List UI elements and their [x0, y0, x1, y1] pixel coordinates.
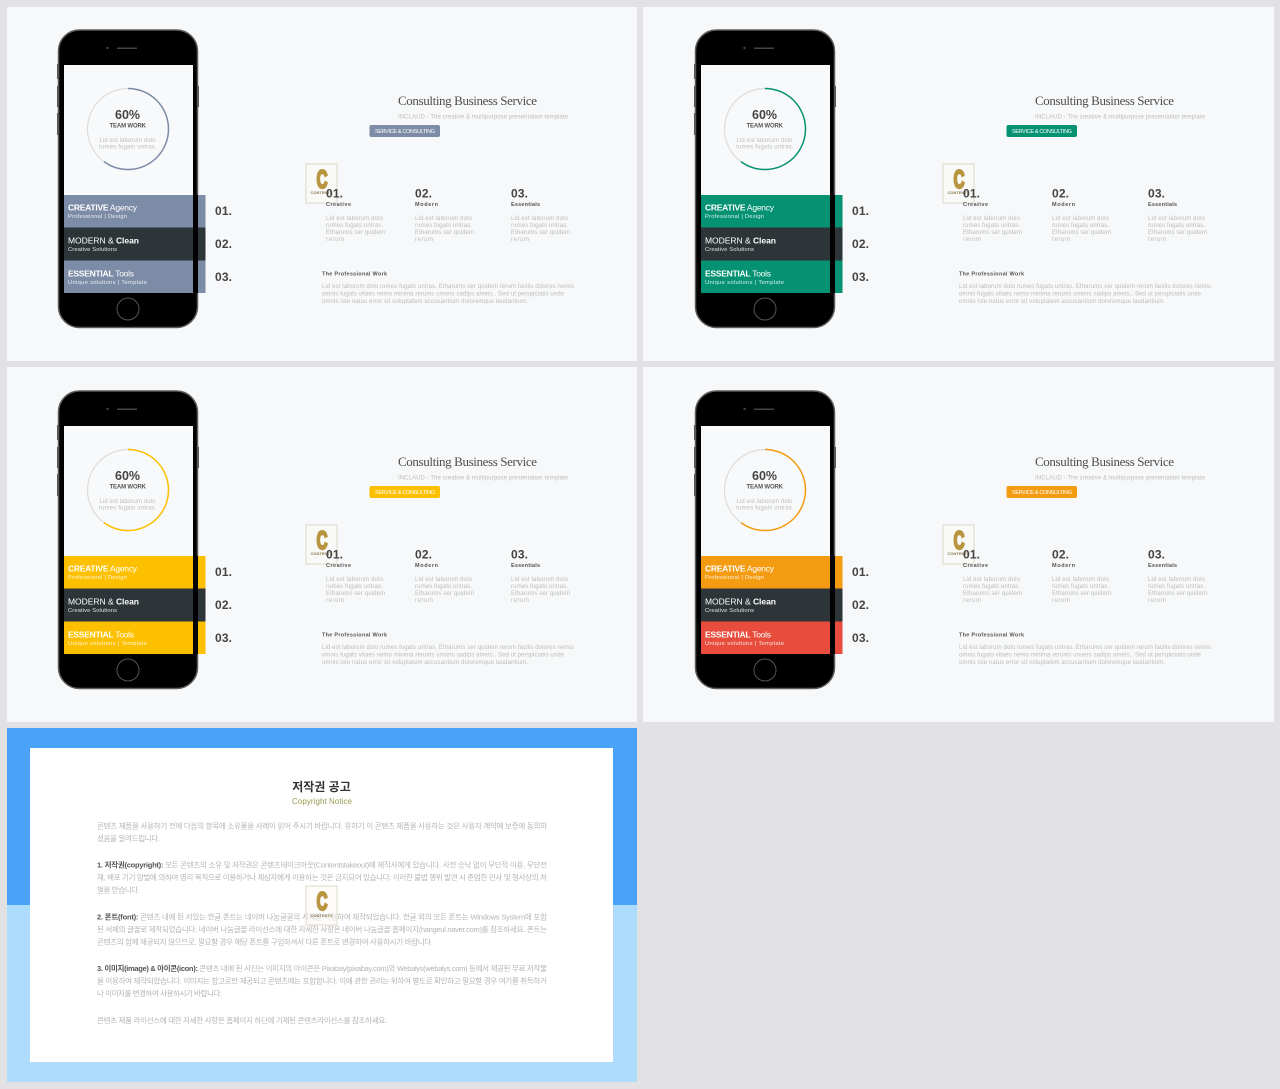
list: side numbers [852, 204, 869, 284]
list: three phone bars with side tabs: Unique solutions | Template [68, 280, 147, 286]
column 2: 02. [415, 186, 432, 200]
icon: watermark logo [943, 164, 974, 203]
column 2: Lid est laborum dolo [1052, 577, 1110, 583]
icon: watermark logo [943, 525, 974, 564]
column 2 [1052, 548, 1111, 604]
column 2: Modern [1052, 202, 1076, 208]
chart: 60 percent ring: rumes fugats untras. [736, 506, 794, 512]
list: three phone bars with side tabs: ESSENTIAL Tools [68, 268, 134, 278]
text block: 3 image and icon: 나 이미지를 변경하여 사용하시기 바랍니다. [97, 988, 222, 998]
column 1 [963, 548, 1022, 604]
subtitle: INCLAUD - The creative & multipurpose presentation template [1035, 476, 1206, 482]
chart: 60 percent ring: Lid est laborum dolo [100, 138, 156, 144]
text block: professional work: The Professional Work [322, 632, 388, 638]
column 3: Etharums ser quidem [1148, 230, 1207, 236]
column 3 [511, 186, 570, 243]
column 2 [415, 548, 474, 604]
badge [1006, 125, 1077, 137]
column 2: rumes fugats untras. [1052, 223, 1109, 229]
list: three phone bars with side tabs: Creative Solutions [68, 608, 117, 614]
text block: professional work: omnis iste natus error sit voluptatem accusantium doloremque laudantium. [322, 660, 528, 666]
column 2: rumes fugats untras. [415, 584, 472, 590]
list: side numbers [852, 565, 869, 645]
column 3: rumes fugats untras. [511, 584, 568, 590]
text block: 1 copyright [97, 860, 547, 894]
text block: professional work [959, 272, 1211, 305]
list: three phone bars with side tabs: MODERN & Clean [68, 236, 139, 246]
column 2: Modern [1052, 563, 1076, 569]
icon: watermark logo: CONTENTS [948, 190, 970, 195]
badge [370, 486, 440, 498]
panel: slide 4 orange and red theme [643, 367, 1274, 722]
column 2: rerum [1052, 598, 1070, 604]
chart: 60 percent ring: Lid est laborum dolo [736, 138, 793, 144]
column 2: 02. [415, 548, 432, 562]
column 3: 03. [1148, 186, 1165, 200]
icon: phone [57, 30, 199, 328]
column 2 [1052, 186, 1111, 243]
icon: watermark logo: C [317, 527, 327, 555]
text block: professional work: The Professional Work [959, 632, 1025, 638]
icon: watermark logo: C [954, 166, 964, 194]
title: Consulting Business Service [398, 93, 537, 108]
badge [370, 125, 440, 137]
column 1: Etharums ser quidem [326, 230, 385, 236]
list: side numbers: 02. [215, 598, 232, 612]
column 1: 01. [963, 186, 980, 200]
list: three phone bars with side tabs: MODERN & Clean [68, 596, 139, 606]
text block: professional work: omnis iste natus error sit voluptatem accusantium doloremque laudantium. [959, 660, 1165, 666]
text block: professional work: The Professional Work [322, 272, 388, 278]
column 3 [511, 548, 570, 604]
column 1: Creative [326, 202, 351, 208]
column 2: rumes fugats untras. [415, 223, 472, 229]
list: three phone bars with side tabs: MODERN & Clean [705, 236, 776, 246]
text block: professional work: omnis fugats vitaes nemo minima rerums unsers sadips amets.. Sed ut perspiciatis unde [322, 652, 565, 658]
panel: slide 3 yellow theme [7, 367, 637, 722]
title: Consulting Business Service [1035, 454, 1174, 469]
list: side numbers: 02. [852, 598, 869, 612]
column 2: rumes fugats untras. [1052, 584, 1109, 590]
column 3: 03. [511, 186, 528, 200]
text block: professional work: Lid est laborum dolo rumes fugats untras. Etharums ser quidem rerum facilis dolores nemis [959, 284, 1211, 290]
column 2: Etharums ser quidem [1052, 230, 1111, 236]
column 3: rumes fugats untras. [1148, 223, 1205, 229]
column 1: Etharums ser quidem [326, 591, 385, 597]
subtitle: INCLAUD - The creative & multipurpose presentation template [1035, 114, 1206, 120]
list: side numbers: 03. [852, 631, 869, 645]
chart: 60 percent ring: 60% [115, 469, 140, 483]
text block: professional work: Lid est laborum dolo rumes fugats untras. Etharums ser quidem rerum facilis dolores nemis [959, 645, 1211, 651]
column 1: 01. [326, 548, 343, 562]
column 3: 03. [511, 548, 528, 562]
icon: watermark logo [306, 164, 337, 203]
column 3: Etharums ser quidem [511, 230, 570, 236]
text block: professional work [959, 632, 1211, 666]
text block: 1 copyright: 1. 저작권(copyright): 모든 콘텐츠의 소유 및 저작권은 콘텐츠테이크아웃(Contentstakeout)에 제작사에게 있습니다. 사전 승낙 없이 무단적 이용, 무단전 [97, 860, 547, 870]
column 1: Etharums ser quidem [963, 591, 1022, 597]
badge: SERVICE & CONSULTING [1012, 490, 1072, 496]
heading: copyright notice: 저작권 공고 [292, 779, 351, 794]
chart: 60 percent ring: Lid est laborum dolo [736, 499, 793, 505]
text block: professional work: omnis iste natus error sit voluptatem accusantium doloremque laudantium. [322, 299, 528, 305]
icon: watermark logo: C [317, 166, 327, 194]
text block: professional work: omnis fugats vitaes nemo minima rerums unsers sadips amets.. Sed ut perspiciatis unde [959, 292, 1202, 298]
column 2: rerum [415, 237, 433, 243]
column 3: Essentials [1148, 563, 1177, 569]
list: three phone bars with side tabs [64, 195, 206, 293]
chart: 60 percent ring: TEAM WORK [110, 484, 147, 490]
list: three phone bars with side tabs: CREATIVE Agency [705, 202, 775, 212]
chart: 60 percent ring [88, 88, 168, 170]
list: three phone bars with side tabs: ESSENTIAL Tools [68, 630, 134, 640]
text block: 2 font: 콘텐츠의 함께 제공되지 않으므로, 필요할 경우 해당 폰트를 구입하셔서 다른 폰트로 변경하여 사용하시기 바랍니다. [97, 936, 433, 946]
column 3: rumes fugats untras. [511, 223, 568, 229]
column 1: rumes fugats untras. [963, 584, 1020, 590]
column 1: rumes fugats untras. [326, 223, 383, 229]
column 3: rerum [511, 237, 529, 243]
list: three phone bars with side tabs: Professional | Design [68, 575, 127, 581]
column 2: rerum [1052, 237, 1070, 243]
column 1: Lid est laborum dolo [326, 577, 384, 583]
text block: license note: 콘텐츠 제품 라이선스에 대한 자세한 사항은 홈페이지 하단에 기재된 콘텐츠라이선스를 참조하세요. [97, 1015, 387, 1025]
chart: 60 percent ring: TEAM WORK [746, 124, 784, 130]
column 3: rumes fugats untras. [1148, 584, 1205, 590]
icon: phone [57, 391, 199, 688]
text block: 1 copyright: 재, 배포 기기 양벌에 의하여 영리 목적으로 이용하거나 제삼자에게 이용하는 것은 금지되어 있습니다. 이러한 불법 행위 발견 시 준엄한 민사 및 형사상의 처 [97, 872, 547, 882]
chart: 60 percent ring: rumes fugats untras. [736, 144, 794, 150]
list: side numbers: 02. [852, 237, 869, 251]
title: Consulting Business Service [1035, 93, 1174, 108]
column 2: Lid est laborum dolo [415, 577, 473, 583]
chart: 60 percent ring: TEAM WORK [746, 484, 784, 490]
list: side numbers: 03. [215, 270, 232, 284]
chart: 60 percent ring: rumes fugats untras. [99, 144, 157, 150]
text block: 3 image and icon: 3. 이미지(image) & 아이콘(icon): 콘텐츠 내에 된 사진는 이미지의 아이콘은 Pixabay(pixabay.com)와 Webalys(webalys.com) 등에서 제공된 무료 저작물 [97, 963, 547, 973]
column 2: Lid est laborum dolo [1052, 216, 1110, 222]
column 3: rerum [511, 598, 529, 604]
column 3: Etharums ser quidem [511, 591, 570, 597]
list: three phone bars with side tabs: Unique solutions | Template [705, 641, 784, 647]
list: side numbers: 01. [852, 204, 869, 218]
panel: copyright notice slide [7, 728, 637, 1082]
column 3: Lid est laborum dolo [1148, 216, 1206, 222]
text block: professional work: The Professional Work [959, 272, 1025, 278]
list: three phone bars with side tabs [701, 195, 842, 293]
column 2: 02. [1052, 548, 1069, 562]
icon: watermark logo: CONTENTS [948, 551, 970, 556]
column 1: Etharums ser quidem [963, 230, 1022, 236]
icon: watermark logo: CONTENTS [310, 551, 333, 556]
icon: phone [694, 391, 836, 688]
list: three phone bars with side tabs [701, 556, 842, 654]
column 1: rumes fugats untras. [963, 223, 1020, 229]
column 2: 02. [1052, 186, 1069, 200]
chart: 60 percent ring: TEAM WORK [110, 124, 147, 130]
list: three phone bars with side tabs: CREATIVE Agency [68, 202, 138, 212]
column 3: rerum [1148, 237, 1166, 243]
list: side numbers: 01. [852, 565, 869, 579]
subtitle: INCLAUD - The creative & multipurpose presentation template [398, 114, 569, 120]
text block: professional work [322, 632, 574, 666]
heading: copyright notice: Copyright Notice [292, 797, 353, 806]
list: three phone bars with side tabs: Creative Solutions [705, 608, 754, 614]
column 2: Lid est laborum dolo [415, 216, 473, 222]
column 1: Creative [963, 202, 988, 208]
list: side numbers: 03. [852, 270, 869, 284]
column 3: Lid est laborum dolo [511, 216, 569, 222]
column 3: Essentials [1148, 202, 1177, 208]
list: three phone bars with side tabs: Professional | Design [705, 214, 764, 220]
column 1: rumes fugats untras. [326, 584, 383, 590]
column 2: Modern [415, 202, 439, 208]
text block: professional work: Lid est laborum dolo rumes fugats untras. Etharums ser quidem rerum facilis dolores nemis [322, 284, 574, 290]
column 2: Etharums ser quidem [415, 591, 474, 597]
icon: watermark logo [306, 886, 337, 925]
column 3: Essentials [511, 563, 540, 569]
text block: 3 image and icon: 을 이용하여 제작되었습니다. 이미지는 참고로만 제공되고 콘텐츠에는 포함합니다. 이에 관한 권리는 위하여 별도로 확인하고 필요할 경우 여기를 취득하거 [97, 976, 547, 986]
chart: 60 percent ring [88, 450, 168, 530]
column 3: 03. [1148, 548, 1165, 562]
column 3: Etharums ser quidem [1148, 591, 1207, 597]
chart: 60 percent ring [724, 88, 806, 170]
list: three phone bars with side tabs: Creative Solutions [705, 247, 754, 253]
column 3 [1148, 548, 1207, 604]
subtitle: INCLAUD - The creative & multipurpose presentation template [398, 476, 569, 482]
column 3: Lid est laborum dolo [511, 577, 569, 583]
icon: watermark logo: C [317, 888, 327, 916]
text block: professional work [322, 272, 574, 305]
list: three phone bars with side tabs: MODERN & Clean [705, 596, 776, 606]
chart: 60 percent ring: 60% [115, 108, 140, 122]
icon: watermark logo: CONTENTS [310, 913, 333, 918]
text block: professional work: omnis fugats vitaes nemo minima rerums unsers sadips amets.. Sed ut perspiciatis unde [322, 292, 565, 298]
badge: SERVICE & CONSULTING [1012, 129, 1072, 135]
badge: SERVICE & CONSULTING [375, 129, 435, 135]
list: three phone bars with side tabs [64, 556, 206, 654]
chart: 60 percent ring: 60% [752, 469, 777, 483]
column 2 [415, 186, 474, 243]
panel: slide 1 slate theme [7, 7, 637, 361]
text block: professional work: omnis iste natus error sit voluptatem accusantium doloremque laudantium. [959, 299, 1165, 305]
column 3 [1148, 186, 1207, 243]
list: three phone bars with side tabs: Unique solutions | Template [705, 280, 784, 286]
list: three phone bars with side tabs: ESSENTIAL Tools [705, 268, 771, 278]
chart: 60 percent ring [724, 450, 806, 530]
column 1: Lid est laborum dolo [326, 216, 384, 222]
column 1: Lid est laborum dolo [963, 216, 1021, 222]
icon: phone [694, 30, 836, 328]
list: side numbers: 03. [215, 631, 232, 645]
text block: professional work: omnis fugats vitaes nemo minima rerums unsers sadips amets.. Sed ut perspiciatis unde [959, 652, 1202, 658]
column 1: rerum [963, 237, 981, 243]
text block: 1 copyright: 벌을 받습니다. [97, 884, 140, 894]
list: three phone bars with side tabs: CREATIVE Agency [68, 564, 138, 574]
list: three phone bars with side tabs: Creative Solutions [68, 247, 117, 253]
list: three phone bars with side tabs: Professional | Design [68, 214, 127, 220]
column 3: Lid est laborum dolo [1148, 577, 1206, 583]
list: three phone bars with side tabs: Professional | Design [705, 575, 764, 581]
chart: 60 percent ring: Lid est laborum dolo [100, 499, 156, 505]
column 2: Etharums ser quidem [1052, 591, 1111, 597]
list: side numbers [215, 565, 232, 645]
list: three phone bars with side tabs: CREATIVE Agency [705, 564, 775, 574]
icon: watermark logo: CONTENTS [310, 190, 333, 195]
list: side numbers: 01. [215, 565, 232, 579]
heading: copyright notice [292, 779, 353, 806]
badge [1006, 486, 1077, 498]
chart: 60 percent ring: rumes fugats untras. [99, 506, 157, 512]
column 1: 01. [963, 548, 980, 562]
text block: 2 font [97, 912, 547, 946]
column 2: Etharums ser quidem [415, 230, 474, 236]
icon: watermark logo [306, 525, 337, 564]
icon: watermark logo: C [954, 527, 964, 555]
text block: professional work: Lid est laborum dolo rumes fugats untras. Etharums ser quidem rerum facilis dolores nemis [322, 645, 574, 651]
column 1: rerum [963, 598, 981, 604]
column 1: Creative [326, 563, 351, 569]
column 1: rerum [326, 598, 344, 604]
column 3: rerum [1148, 598, 1166, 604]
column 1 [326, 186, 385, 243]
column 1: rerum [326, 237, 344, 243]
list: three phone bars with side tabs: Unique solutions | Template [68, 641, 147, 647]
panel: slide 2 green theme [643, 7, 1274, 361]
badge: SERVICE & CONSULTING [375, 490, 435, 496]
column 1: 01. [326, 186, 343, 200]
column 3: Essentials [511, 202, 540, 208]
text block: introduction [97, 820, 547, 843]
text block: 3 image and icon [97, 963, 547, 998]
column 1: Creative [963, 563, 988, 569]
text block: 2 font: 2. 폰트(font): 콘텐츠 내에 된 서있는 한글 폰트는 네이버 나눔글꼴의 서체를 사용하여 제작되었습니다. 한글 외의 모든 폰트는 Windows System에 포함 [97, 912, 547, 922]
text block: introduction: 셨음을 알려드립니다. [97, 833, 160, 843]
title: Consulting Business Service [398, 454, 537, 469]
column 1 [326, 548, 385, 604]
column 1 [963, 186, 1022, 243]
column 2: Modern [415, 563, 439, 569]
column 1: Lid est laborum dolo [963, 577, 1021, 583]
chart: 60 percent ring: 60% [752, 108, 777, 122]
text block: 2 font: 된 서체의 글꼴로 제작되었습니다. 네이버 나눔글꼴 라이선스에 대한 자세한 사항은 네이버 나눔글꼴 홈페이지(hangeul.naver.com)를 참조하세요. 폰트는 [97, 924, 547, 934]
list: side numbers: 01. [215, 204, 232, 218]
text block: introduction: 콘텐츠 제품을 사용하기 전에 다음의 항목에 소유물을 사례이 읽어 주시기 바랍니다. 유하기 이 콘텐츠 제품을 사용하는 것은 사용자 계약에 보증에 동의하 [97, 820, 547, 830]
list: side numbers: 02. [215, 237, 232, 251]
list: side numbers [215, 204, 232, 284]
column 2: rerum [415, 598, 433, 604]
list: three phone bars with side tabs: ESSENTIAL Tools [705, 630, 771, 640]
